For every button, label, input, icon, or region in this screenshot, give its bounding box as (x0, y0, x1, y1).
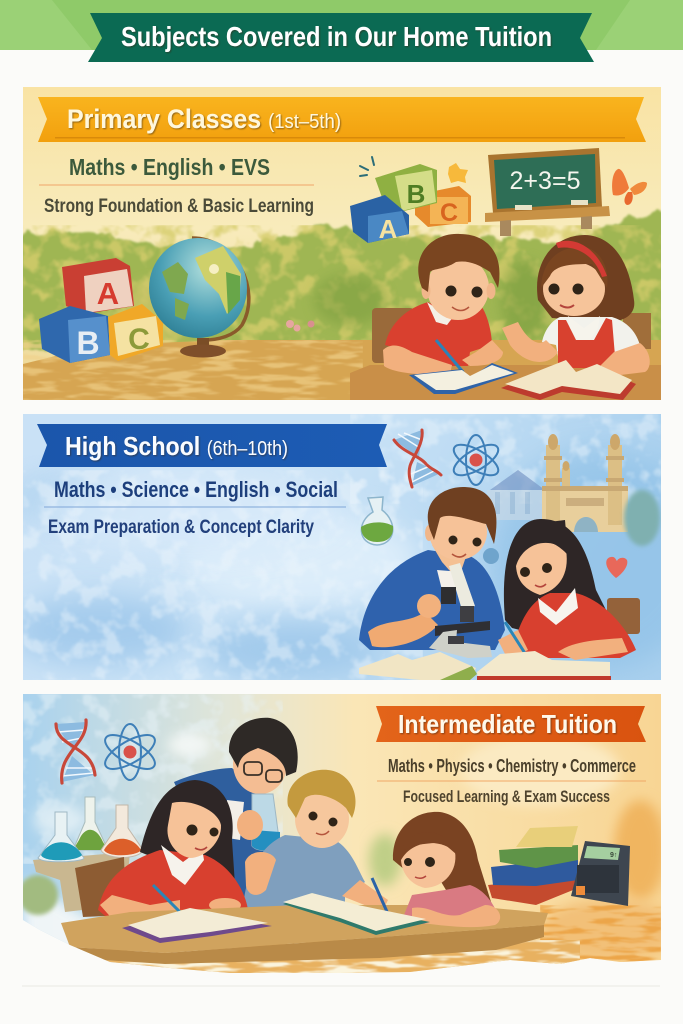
head (428, 262, 489, 320)
hair (418, 234, 499, 292)
icon: big abc blocks (39, 258, 163, 363)
pen (505, 622, 528, 658)
chair (623, 313, 651, 349)
section banner: high school (37, 424, 387, 467)
high school panel background (23, 414, 661, 680)
primary panel background (23, 87, 661, 364)
shirt (359, 550, 505, 650)
head (516, 543, 567, 595)
icon: small abc blocks: A (379, 214, 398, 244)
sweater (512, 593, 636, 658)
open book (501, 360, 636, 400)
shirt (400, 885, 500, 925)
illustration: chair (75, 857, 126, 917)
illustration: boy studying (372, 234, 503, 375)
open book left (122, 908, 272, 943)
head (429, 504, 487, 560)
watercolor texture (23, 694, 680, 974)
hair (428, 487, 496, 544)
icon: flasks (38, 797, 143, 862)
hair (504, 519, 606, 640)
open book left (359, 652, 477, 680)
face (401, 843, 455, 888)
illustration: blond boy (243, 770, 388, 912)
wooden desk right (350, 365, 661, 400)
pen (372, 878, 388, 914)
head (543, 262, 605, 316)
hand (237, 810, 263, 840)
banner heading: High School (6th–10th) (65, 431, 288, 461)
icon: small abc blocks: B (407, 179, 425, 209)
blouse (542, 317, 640, 356)
bottom fade left (23, 880, 100, 975)
foliage background (15, 214, 670, 350)
open blue book (409, 363, 518, 394)
banner heading: Primary Classes (1st–5th) (67, 104, 341, 134)
arm (498, 630, 528, 660)
illustration: girl in pink (372, 812, 500, 927)
arms (100, 895, 180, 922)
illustration: teacher (174, 718, 298, 905)
shirt (243, 835, 365, 908)
section banner: intermediate (376, 706, 646, 742)
arm (245, 852, 276, 895)
icon: butterfly (612, 169, 647, 205)
illustration: charminar (542, 434, 628, 532)
icon: dna (56, 720, 95, 783)
icon: flask (361, 497, 393, 545)
panel: intermediate (18, 694, 680, 975)
icon: star (448, 163, 468, 183)
hair (140, 780, 235, 885)
illustration: girl studying (502, 235, 651, 376)
icon: ball (483, 548, 499, 564)
arm (368, 612, 438, 647)
side table (33, 852, 130, 912)
chair (607, 598, 640, 634)
shirt (385, 302, 492, 366)
fringe (541, 247, 607, 288)
arm (412, 905, 500, 927)
glasses (244, 762, 282, 782)
icon: big abc blocks: A (97, 276, 119, 311)
title banner (88, 13, 594, 62)
tagline: Exam Preparation & Concept Clarity (48, 517, 314, 538)
beaker (252, 794, 280, 850)
open book right (477, 651, 611, 680)
hair (393, 812, 492, 905)
illustration: girl with pen (498, 519, 640, 660)
trees (624, 490, 660, 546)
icon: big abc blocks: B (76, 325, 100, 361)
vest (558, 318, 616, 368)
watercolor wash (10, 414, 683, 680)
icon: heart (606, 557, 627, 578)
banner heading: Intermediate Tuition (398, 709, 617, 739)
neck (432, 545, 470, 580)
intermediate panel background (23, 694, 661, 974)
jacket (174, 768, 272, 905)
subjects: Maths • Science • English • Social (54, 477, 338, 502)
illustration: wooden table (61, 905, 548, 964)
title text: Subjects Covered in Our Home Tuition (121, 21, 552, 52)
illustration: distant building (487, 470, 545, 520)
icon: big abc blocks: C (128, 323, 150, 356)
icon: small abc blocks (350, 164, 471, 244)
icon: atom (100, 724, 160, 780)
wooden table left (23, 340, 661, 400)
face (233, 734, 287, 794)
icon: calculator: 9↑ (610, 852, 617, 859)
green header band (0, 0, 683, 50)
icon: atom (449, 435, 503, 485)
panel: high school (10, 414, 683, 680)
pen (436, 340, 463, 372)
illustration: boy with microscope (359, 487, 505, 650)
head (295, 790, 349, 848)
icon: chalkboard (485, 148, 610, 236)
illustration: microscope (429, 563, 492, 658)
icon: calculator (571, 841, 630, 906)
open book middle (283, 893, 430, 935)
icon: small abc blocks: C (440, 199, 458, 227)
section banner: primary (38, 97, 646, 142)
icon: stack of books (488, 826, 578, 905)
hair (229, 718, 298, 776)
icon: sparks (360, 157, 374, 176)
icon: dna (394, 430, 441, 487)
pen (153, 885, 188, 920)
tagline: Strong Foundation & Basic Learning (44, 196, 314, 217)
face (167, 802, 221, 858)
icon: chalkboard: 2+3=5 (510, 167, 580, 195)
panel: primary classes (15, 87, 670, 400)
tagline: Focused Learning & Exam Success (403, 787, 610, 806)
hair (288, 770, 356, 818)
sweater (98, 850, 248, 920)
arms (383, 346, 452, 375)
chair (372, 308, 414, 363)
footer rule (22, 986, 660, 987)
left bush (18, 875, 58, 915)
icon: globe (149, 238, 249, 358)
arms (502, 322, 558, 362)
hair back (537, 235, 634, 322)
subjects: Maths • English • EVS (69, 154, 270, 180)
illustration: girl in red sweater (98, 780, 248, 922)
